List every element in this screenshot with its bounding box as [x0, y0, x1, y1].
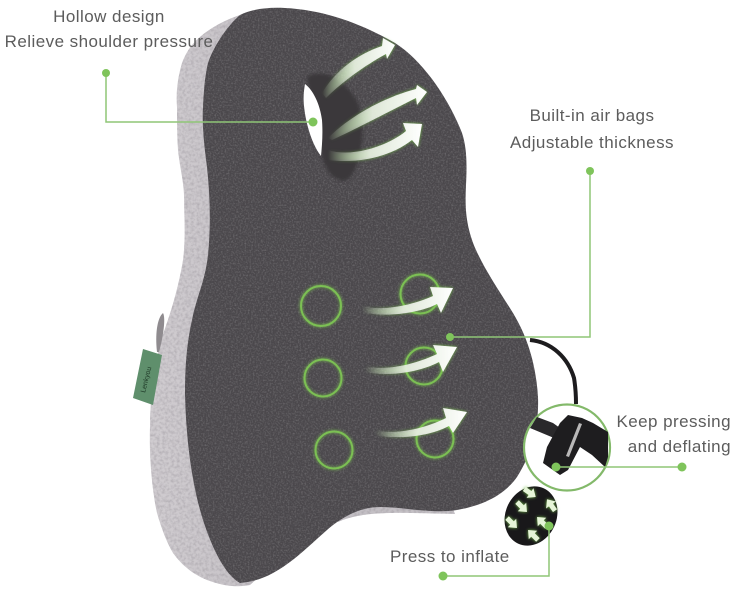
hollow recess: [304, 74, 362, 181]
bulb arrows: [503, 484, 560, 544]
cushion green tag: Lenkyou: [140, 366, 153, 393]
label: press to inflate: Press to inflate: [390, 547, 510, 566]
cushion side panel: [150, 15, 455, 586]
label: hollow design: Hollow design: [53, 7, 165, 26]
label: built-in air bags: Built-in air bags: [530, 106, 654, 125]
label: keep pressing: [616, 412, 731, 456]
cushion green tag: [133, 349, 162, 405]
label: keep pressing: and deflating: [628, 437, 731, 456]
label: built-in air bags: Adjustable thickness: [510, 133, 674, 152]
cushion strap: [156, 313, 164, 352]
hollow opening: [304, 84, 322, 156]
label: keep pressing: Keep pressing: [616, 412, 731, 431]
air bag arrows: [362, 287, 467, 437]
shoulder arrows: [322, 38, 427, 161]
callout lines: [106, 73, 682, 576]
air bag rings left: [301, 286, 352, 468]
air bag rings right: [400, 274, 454, 458]
cushion dark face: [185, 8, 538, 583]
label: hollow design: Relieve shoulder pressure: [5, 32, 213, 51]
label: hollow design: [5, 7, 213, 51]
valve body: [543, 415, 608, 475]
valve stub: [530, 417, 560, 438]
air hose: [530, 340, 576, 404]
label: built-in air bags: [510, 106, 674, 152]
valve highlight: [566, 423, 582, 457]
inset: deflate valve: [524, 404, 610, 490]
cushion: [133, 8, 538, 586]
callout dots: [102, 69, 686, 580]
inflate bulb: [495, 478, 567, 554]
